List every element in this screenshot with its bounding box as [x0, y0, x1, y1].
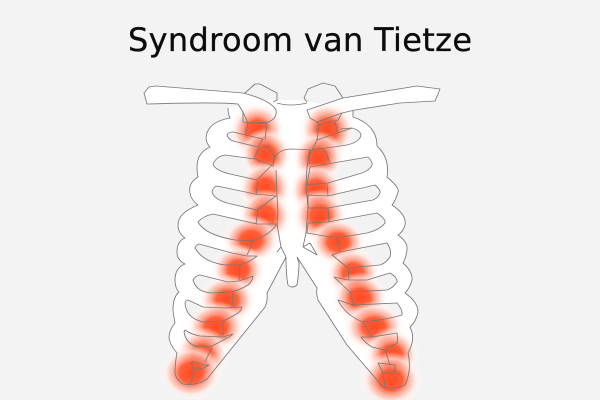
clavicles and upper bones	[144, 83, 440, 123]
bone outlines	[144, 83, 440, 388]
rib cage silhouette	[169, 100, 418, 388]
left clavicle	[144, 86, 276, 123]
right clavicle	[307, 86, 440, 122]
right inflammation glow	[288, 100, 423, 400]
right cartilage joints	[307, 113, 390, 388]
right rib gap outlines	[312, 128, 361, 150]
right rib outer edge	[297, 110, 418, 388]
left rib outer edge	[169, 108, 286, 384]
gaps between left ribs	[184, 132, 277, 369]
xiphoid process	[277, 243, 317, 287]
title: Syndroom van Tietze	[128, 21, 472, 59]
left inflammation glow	[159, 101, 293, 400]
left cartilage joints	[190, 112, 275, 384]
left rib gap outlines	[227, 132, 263, 147]
rib cage illustration	[144, 83, 440, 400]
gaps between right ribs	[307, 128, 402, 373]
sternum edges	[273, 149, 310, 247]
